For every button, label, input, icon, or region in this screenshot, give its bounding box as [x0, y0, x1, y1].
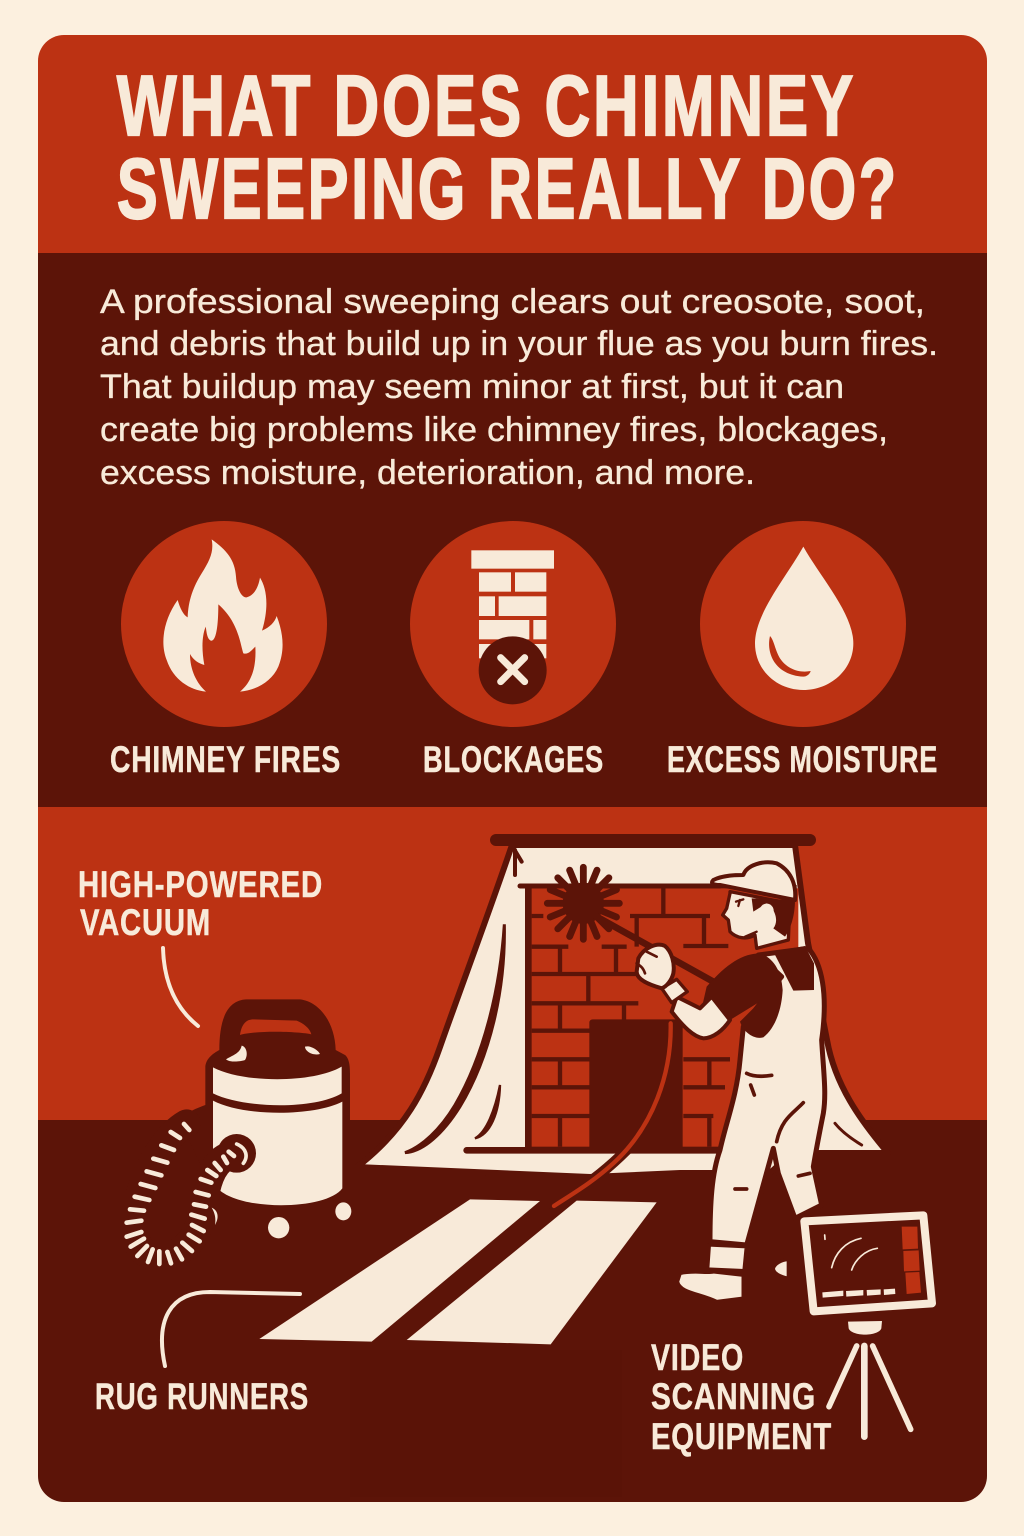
- intro text block: That buildup may seem minor at first, but it can: [100, 368, 844, 406]
- title: [117, 59, 899, 237]
- label: video scanning equipment: VIDEO: [651, 1337, 744, 1378]
- intro text block: and debris that build up in your flue as you burn fires.: [100, 325, 938, 363]
- label: high-powered vacuum: VACUUM: [80, 902, 211, 943]
- brick fireplace: [467, 885, 798, 1152]
- intro text block: A professional sweeping clears out creosote, soot,: [100, 283, 925, 321]
- mantel bar: [490, 834, 816, 846]
- video scanning monitor on tripod: [804, 1215, 932, 1437]
- label: video scanning equipment: EQUIPMENT: [651, 1416, 832, 1457]
- intro text block: [100, 283, 938, 492]
- icon: chimney fires: [121, 521, 327, 727]
- intro text block: create big problems like chimney fires, blockages,: [100, 411, 888, 449]
- icon: water drop: [700, 521, 906, 727]
- label: video scanning equipment: [651, 1337, 832, 1457]
- icon: blocked chimney: [410, 521, 616, 727]
- label: chimney fires: CHIMNEY FIRES: [110, 739, 341, 780]
- label: high-powered vacuum: HIGH-POWERED: [78, 864, 323, 905]
- camera cable: [554, 1023, 671, 1206]
- label: video scanning equipment: SCANNING: [651, 1376, 816, 1417]
- vacuum cleaner: [127, 999, 351, 1264]
- label: blockages: BLOCKAGES: [423, 739, 604, 780]
- callout line: rug runners: [162, 1292, 300, 1366]
- worker sweeping chimney: [637, 862, 825, 1302]
- intro text block: excess moisture, deterioration, and more.: [100, 454, 755, 492]
- label: high-powered vacuum: [78, 864, 323, 943]
- chimney brush: [547, 867, 713, 982]
- label: rug runners: RUG RUNNERS: [95, 1376, 309, 1417]
- rug runners: [259, 1199, 657, 1344]
- callout line: vacuum: [163, 948, 198, 1026]
- drop cloth sheet: [357, 845, 888, 1177]
